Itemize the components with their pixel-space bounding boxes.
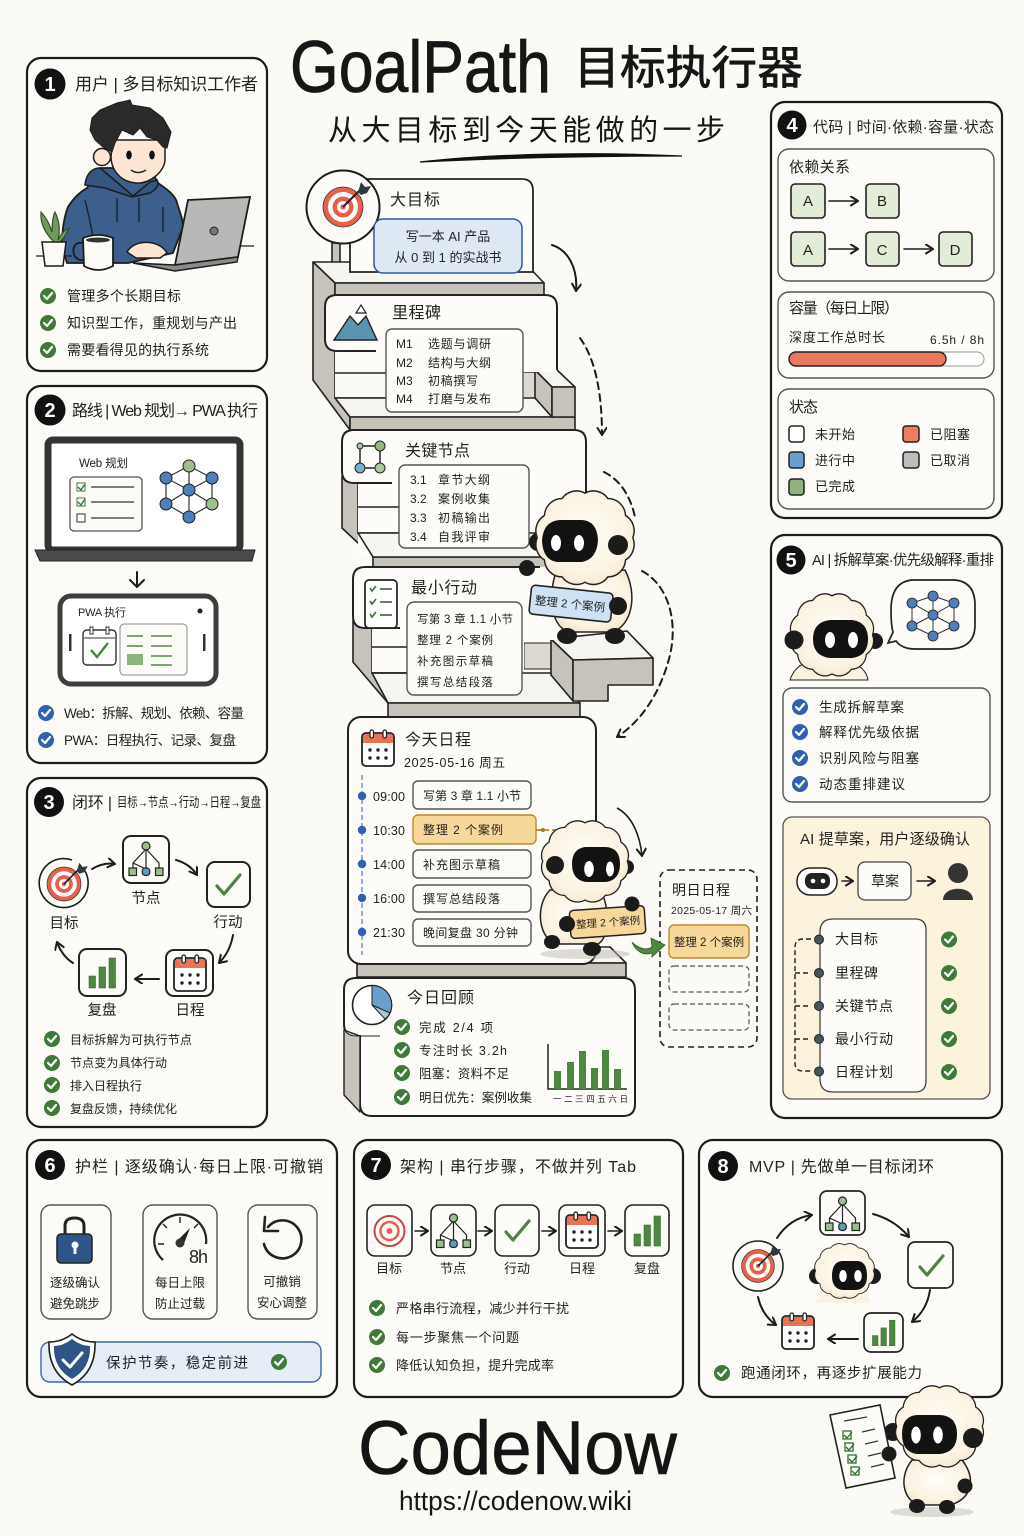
- title: 目标执行器: [574, 42, 803, 94]
- action list: [407, 602, 522, 695]
- badge 7: [361, 1150, 391, 1180]
- checklist: AI capabilities: 解释优先级依据: [819, 725, 919, 740]
- step title: key nodes: 关键节点: [405, 442, 470, 460]
- sub-panel: dependencies: C: [877, 242, 888, 259]
- confirmation steps: 日程计划: [835, 1064, 893, 1080]
- phone: PWA execution: PWA 执行: [78, 605, 126, 619]
- heading 4: 代码 | 时间·依赖·容量·状态: [813, 119, 994, 136]
- icon: mountains: [334, 305, 377, 340]
- badge 6: 6: [44, 1155, 56, 1177]
- checklist: loop: [44, 1031, 192, 1116]
- checklist: architecture: 每一步聚焦一个问题: [396, 1330, 519, 1345]
- sub-panel: draft confirmation: [783, 817, 990, 1099]
- checklist paper: [830, 1405, 895, 1488]
- badge 2: [34, 394, 66, 426]
- MVP loop diagram: [733, 1191, 953, 1352]
- panel 7: architecture: [354, 1140, 683, 1397]
- step title: big goal: 大目标: [390, 191, 440, 209]
- review checklist: [394, 1019, 532, 1105]
- goal box: 从 0 到 1 的实战书: [395, 250, 501, 265]
- icon: node graph: [355, 441, 385, 473]
- review checklist: 专注时长 3.2h: [419, 1043, 507, 1058]
- timeline: 写第 3 章 1.1 小节: [423, 788, 521, 803]
- key node list: [399, 465, 529, 548]
- timeline: 14:00: [373, 858, 405, 872]
- icon: target: [306, 170, 380, 244]
- confirmation steps: 里程碑: [835, 965, 878, 981]
- checklist: architecture: [369, 1300, 569, 1373]
- title: GoalPath: [290, 27, 551, 108]
- step title: today's schedule: 今天日程: [405, 731, 471, 749]
- node: review: [79, 949, 126, 1019]
- sub-panel: status legend: 已完成: [815, 479, 855, 494]
- step title: minimal actions: 最小行动: [411, 579, 477, 597]
- timeline: 整理 2 个案例: [423, 822, 503, 837]
- sub-panel: dependencies: A: [803, 242, 813, 259]
- card: daily limit: 防止过载: [155, 1296, 205, 1311]
- sub-panel: dependencies: B: [877, 193, 887, 210]
- icon: calendar: [362, 730, 394, 766]
- flow: robot to draft to user: [797, 862, 973, 900]
- panel 2: route: [27, 386, 267, 763]
- heading 5: AI | 拆解草案·优先级解释·重排: [812, 551, 994, 569]
- badge 4: 4: [786, 115, 798, 137]
- mascot: sheep bust: [784, 594, 883, 680]
- confirmation steps: 关键节点: [835, 998, 893, 1014]
- step 6: today's review: [344, 978, 635, 1116]
- badge 8: [708, 1151, 738, 1181]
- title: [290, 27, 803, 108]
- action list: 写第 3 章 1.1 小节: [417, 612, 513, 626]
- sub-panel: capacity: 深度工作总时长: [789, 330, 885, 345]
- stone steps: lower tier: [353, 620, 653, 717]
- card: undo: 可撤销: [263, 1274, 301, 1289]
- checklist: user traits: [40, 288, 237, 358]
- badge 5: 5: [785, 550, 797, 572]
- laptop: web planning: Web 规划: [79, 456, 128, 470]
- milestone list: 打磨与发布: [428, 391, 491, 406]
- sub-panel: status legend: 状态: [789, 399, 818, 416]
- MVP note: 跑通闭环，再逐步扩展能力: [741, 1365, 922, 1382]
- brand url: https://codenow.wiki: [399, 1486, 632, 1516]
- subtitle: 从大目标到今天能做的一步: [328, 114, 725, 147]
- key node list: 3.2: [410, 492, 427, 506]
- loop diagram: [39, 836, 250, 1019]
- heading 3: 闭环 |: [72, 794, 112, 812]
- arrow: laptop to phone: [130, 572, 144, 587]
- key node list: 章节大纲: [438, 472, 490, 487]
- timeline: 21:30: [373, 926, 405, 940]
- arrows between steps: [552, 245, 673, 856]
- step 3: key nodes: [342, 430, 586, 557]
- badge 2: 2: [44, 400, 56, 422]
- node: goal: 目标: [50, 915, 78, 932]
- stone step: schedule platform: [357, 947, 626, 977]
- key node list: 自我评审: [438, 529, 490, 544]
- heading 6: 护栏 | 逐级确认·每日上限·可撤销: [75, 1158, 323, 1176]
- serial step flow: 复盘: [634, 1261, 660, 1276]
- panel: tomorrow's schedule: 整理 2 个案例: [674, 935, 744, 949]
- node: schedule: 日程: [176, 1002, 204, 1019]
- milestone list: M2: [396, 356, 413, 370]
- checklist: route: [38, 705, 244, 748]
- mascot: sheep on stair holding blue sign: [519, 491, 634, 644]
- key node list: 3.4: [410, 530, 427, 544]
- badge 7: 7: [370, 1155, 382, 1177]
- sub-panel: status legend: 已取消: [930, 453, 970, 468]
- timeline: 16:00: [373, 892, 405, 906]
- milestone list: 结构与大纲: [428, 355, 491, 370]
- node: milestone nodes: 节点: [132, 890, 160, 907]
- sub-panel: draft confirmation: AI 提草案，用户逐级确认: [800, 830, 970, 848]
- speech bubble: network: [888, 580, 975, 649]
- node: milestone nodes: [123, 836, 169, 907]
- panel 8: MVP: [699, 1140, 1002, 1397]
- checklist: route: Web：拆解、规划、依赖、容量: [64, 705, 244, 721]
- milestone list: 选题与调研: [428, 337, 491, 351]
- review checklist: 明日优先：案例收集: [419, 1090, 532, 1105]
- subtitle: [328, 114, 725, 162]
- step 1: big goal: [306, 170, 533, 273]
- panel: tomorrow's schedule: 2025-05-17 周六: [671, 905, 752, 917]
- step 5: today's schedule: [348, 717, 596, 964]
- sub-panel: status legend: 已阻塞: [930, 427, 970, 442]
- date: 2025-05-16 周五: [404, 756, 505, 770]
- sub-panel: status legend: 进行中: [815, 453, 855, 468]
- node: schedule: [166, 950, 213, 1019]
- mascot: sheep on stair holding blue sign: 整理 2 个案例: [534, 593, 606, 615]
- badge 8: 8: [717, 1156, 729, 1178]
- sub-panel: dependencies: 依赖关系: [789, 159, 850, 176]
- timeline: 10:30: [373, 824, 405, 838]
- badge 3: 3: [43, 792, 55, 814]
- card: daily limit: 8h: [189, 1247, 208, 1267]
- checklist: architecture: 严格串行流程，减少并行干扰: [396, 1301, 569, 1316]
- milestone list: 初稿撰写: [428, 373, 478, 388]
- timeline: 撰写总结段落: [423, 891, 500, 906]
- sub-panel: capacity: 6.5h / 8h: [930, 333, 984, 347]
- panel 3: loop: [27, 778, 267, 1127]
- goal box: 写一本 AI 产品: [406, 229, 490, 244]
- sub-panel: dependencies: A: [803, 193, 813, 210]
- review checklist: 完成 2/4 项: [419, 1020, 493, 1035]
- key node list: 3.1: [410, 473, 427, 487]
- milestone list: M1: [396, 337, 413, 351]
- card: step confirmation: 逐级确认: [50, 1276, 100, 1290]
- checklist: loop: 节点变为具体行动: [70, 1055, 167, 1070]
- card: undo: [248, 1205, 317, 1319]
- sub-panel: capacity: 容量（每日上限）: [789, 300, 899, 317]
- node: goal: [39, 859, 88, 932]
- card: step confirmation: [41, 1205, 111, 1319]
- card: undo: 安心调整: [257, 1295, 307, 1310]
- icon: checklist: [365, 580, 397, 628]
- stair flow: [306, 170, 653, 1116]
- heading 7: 架构 | 串行步骤，不做并列 Tab: [400, 1158, 636, 1176]
- card: daily limit: 每日上限: [155, 1275, 205, 1290]
- sub-panel: dependencies: [778, 149, 994, 281]
- action list: 补充图示草稿: [417, 654, 493, 668]
- sub-panel: dependencies: D: [950, 242, 961, 259]
- illustration: person at laptop: [36, 100, 254, 271]
- icon: pie chart: [352, 985, 392, 1024]
- flow: robot to draft to user: 草案: [871, 873, 899, 889]
- timeline: 09:00: [373, 790, 405, 804]
- checklist: AI capabilities: 动态重排建议: [819, 777, 906, 792]
- step 2: milestones: [325, 295, 557, 412]
- stone steps: middle tier: [342, 476, 563, 568]
- goal box: [374, 219, 522, 273]
- confirmation steps: 最小行动: [835, 1031, 893, 1047]
- sub-panel: status legend: 未开始: [815, 427, 855, 442]
- serial step flow: 节点: [440, 1261, 466, 1276]
- checklist: user traits: 管理多个长期目标: [67, 288, 181, 304]
- sub-panel: capacity: [778, 292, 994, 378]
- checklist: user traits: 需要看得见的执行系统: [67, 342, 209, 358]
- checklist: loop: 目标拆解为可执行节点: [70, 1032, 192, 1047]
- banner: steady progress: 保护节奏，稳定前进: [106, 1355, 248, 1372]
- bar chart: weekly focus: 一 二 三 四 五 六 日: [553, 1094, 628, 1104]
- checklist: AI capabilities: [783, 688, 990, 802]
- badge 3: [34, 787, 64, 817]
- confirmation steps: [795, 919, 957, 1092]
- mascot: sheep center: [809, 1244, 881, 1303]
- checklist: user traits: 知识型工作，重规划与产出: [67, 315, 237, 331]
- icon: shield: [49, 1334, 95, 1385]
- review checklist: 阻塞：资料不足: [419, 1066, 509, 1081]
- badge 6: [35, 1150, 65, 1180]
- arrows: loop: [57, 860, 233, 979]
- mascot: sheep carrying orange sign: 整理 2 个案例: [576, 914, 641, 931]
- step title: today's review: 今日回顾: [407, 989, 474, 1007]
- heading 2: 路线 | Web 规划→ PWA 执行: [72, 402, 258, 420]
- checklist: AI capabilities: 生成拆解草案: [819, 699, 904, 715]
- arrow: move task to tomorrow: [632, 938, 665, 957]
- mascot: sheep carrying orange sign: [540, 821, 646, 959]
- checklist: AI capabilities: 识别风险与阻塞: [819, 750, 920, 766]
- panel 6: guardrails: [27, 1140, 337, 1397]
- badge 1: [34, 68, 66, 100]
- checklist: loop: 复盘反馈，持续优化: [70, 1101, 177, 1116]
- badge 5: [776, 546, 806, 574]
- action list: 整理 2 个案例: [417, 633, 493, 647]
- laptop: web planning: [35, 440, 255, 561]
- panel 4: code: [771, 102, 1002, 518]
- key node list: 初稿输出: [438, 510, 490, 525]
- serial step flow: 目标: [376, 1261, 402, 1276]
- node: action: [207, 862, 250, 931]
- timeline: [358, 775, 570, 955]
- heading 8: MVP | 先做单一目标闭环: [749, 1158, 934, 1176]
- panel: tomorrow's schedule: 明日日程: [672, 882, 730, 898]
- confirmation steps: 大目标: [835, 931, 878, 947]
- banner: steady progress: [41, 1334, 321, 1385]
- panel: tomorrow's schedule: [660, 870, 757, 1047]
- brand logo: CodeNow: [358, 1406, 678, 1491]
- sub-panel: status legend: [778, 389, 994, 509]
- key node list: 3.3: [410, 511, 427, 525]
- milestone list: [386, 329, 523, 412]
- panel 1: user: [27, 58, 267, 371]
- card: step confirmation: 避免跳步: [50, 1296, 100, 1311]
- card: daily limit: [143, 1205, 217, 1319]
- panel 5: AI: [771, 535, 1002, 1118]
- action list: 撰写总结段落: [417, 675, 494, 689]
- heading 1: 用户 | 多目标知识工作者: [75, 75, 258, 94]
- checklist: route: PWA：日程执行、记录、复盘: [64, 732, 236, 748]
- timeline: 晚间复盘 30 分钟: [423, 925, 518, 940]
- serial step flow: 行动: [504, 1261, 530, 1276]
- step title: milestones: 里程碑: [392, 304, 441, 322]
- stone steps: top tier: [313, 243, 575, 430]
- serial step flow: [367, 1205, 669, 1276]
- node: action: 行动: [214, 914, 242, 931]
- key node list: 案例收集: [438, 491, 490, 506]
- phone: PWA execution: [60, 596, 216, 684]
- milestone list: M4: [396, 392, 413, 406]
- checklist: loop: 排入日程执行: [70, 1078, 142, 1093]
- badge 1: 1: [44, 74, 56, 96]
- bar chart: weekly focus: [548, 1044, 628, 1104]
- heading 3: 目标→节点→行动→日程→复盘: [117, 794, 261, 810]
- milestone list: M3: [396, 374, 413, 388]
- node: review: 复盘: [88, 1001, 116, 1019]
- mascot: sheep with checklist: [830, 1386, 983, 1517]
- timeline: 补充图示草稿: [423, 857, 500, 872]
- badge 4: [778, 110, 806, 140]
- serial step flow: 日程: [569, 1261, 595, 1276]
- step 4: minimal actions: [353, 567, 560, 695]
- heading 3: [72, 794, 261, 812]
- checklist: architecture: 降低认知负担，提升完成率: [396, 1358, 554, 1373]
